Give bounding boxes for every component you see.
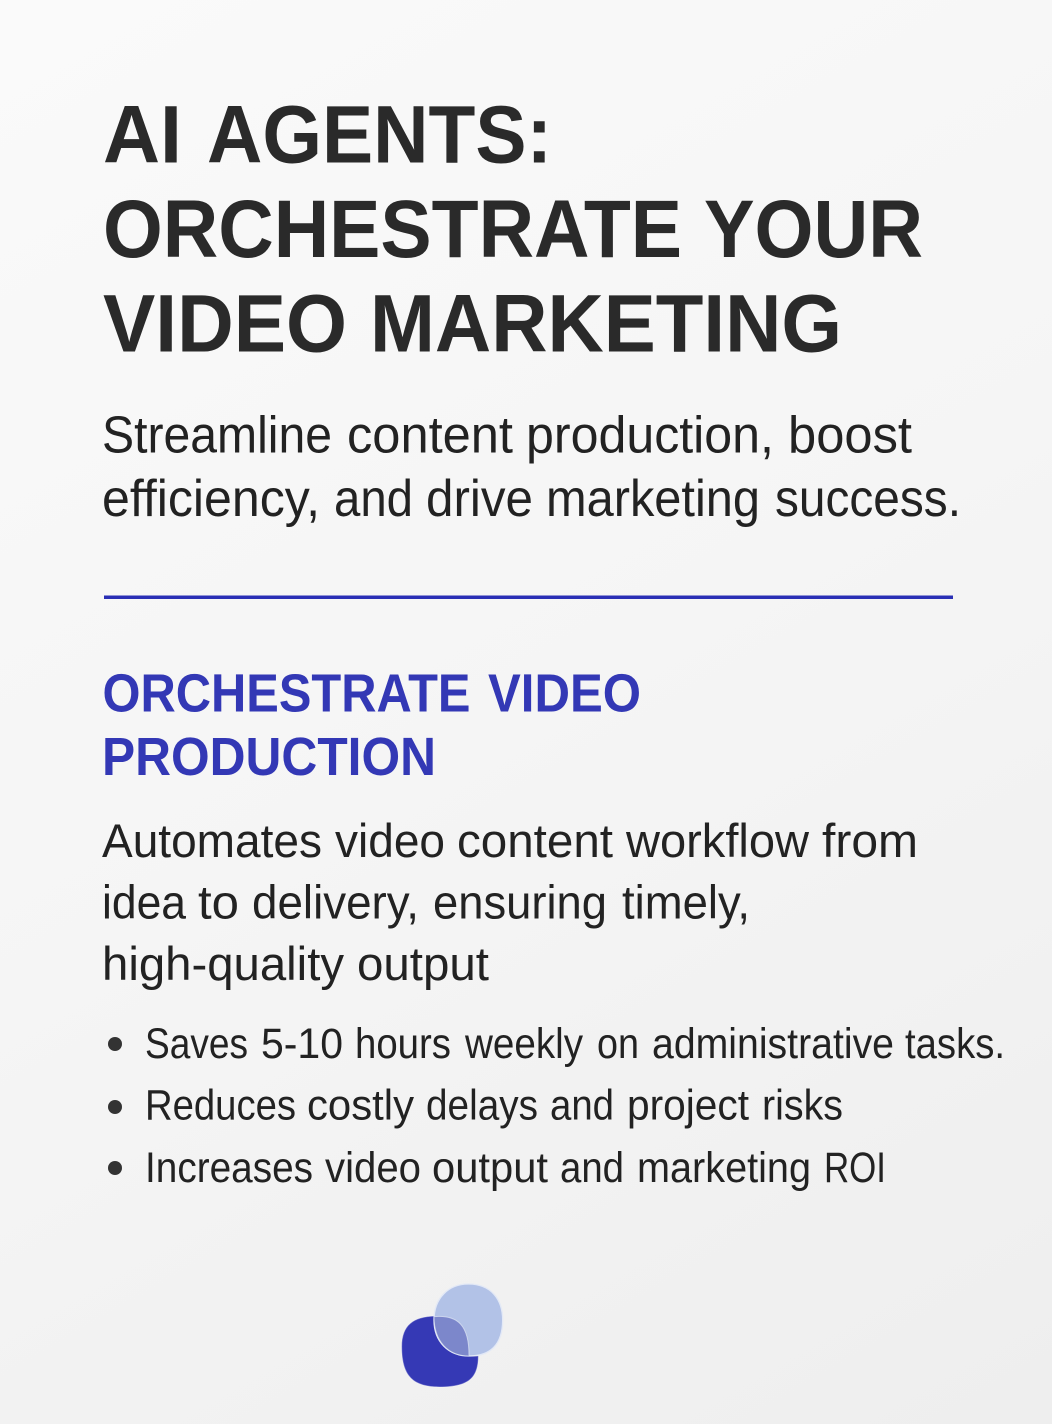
body description: idea [102,876,187,928]
bullet: increases output: output [432,1144,548,1192]
title: AI [103,90,182,180]
title: YOUR [704,184,923,275]
bullet: reduces delays: risks [762,1082,843,1130]
bullet: saves hours [108,1020,1005,1068]
subtitle: production, [526,406,774,464]
bullet: reduces delays: Reduces [145,1082,296,1130]
bullet: increases output: and [560,1144,624,1192]
subtitle: drive [426,470,533,528]
bullet: increases output [108,1144,886,1192]
body description: output [357,937,489,990]
bullet: saves hours: tasks. [905,1020,1005,1068]
bullet: reduces delays: costly [307,1082,414,1130]
body description: Automates [102,814,322,867]
bullet: saves hours: on [597,1020,639,1068]
subtitle: marketing [546,470,760,528]
body description: video [335,814,445,867]
icon: overlapping rounded shapes logo [402,1284,503,1387]
bullet: saves hours: administrative [652,1020,894,1068]
title: VIDEO [103,278,347,370]
bullet: increases output: video [325,1144,421,1192]
bullet: reduces delays: and [550,1082,614,1130]
title: MARKETING [370,278,842,370]
body description: to [198,876,239,928]
body description: ensuring [433,876,607,928]
bullet: reduces delays: project [627,1082,749,1130]
bullet: reduces delays: delays [426,1082,538,1130]
section heading [102,664,641,787]
subtitle: Streamline [102,406,332,464]
section heading: PRODUCTION [102,727,436,787]
bullet: saves hours: Saves [145,1020,248,1068]
bullet: saves hours: weekly [464,1020,583,1068]
body description: high-quality [102,937,344,990]
subtitle: boost [788,406,913,464]
bullet: increases output: marketing [637,1144,811,1192]
subtitle [102,406,961,528]
body description: delivery, [252,876,419,928]
bullet: reduces delays [108,1082,843,1130]
bullet: increases output: ROI [824,1144,886,1192]
title: ORCHESTRATE [103,184,682,275]
bullet: saves hours: 5-10 [261,1020,343,1068]
subtitle: efficiency, [102,470,320,528]
body description: workflow [625,814,810,867]
section heading: VIDEO [488,664,641,724]
subtitle: and [334,470,413,528]
subtitle: success. [775,470,961,528]
title: AGENTS: [207,90,552,180]
title [103,90,923,370]
body description [102,814,918,990]
subtitle: content [347,406,514,464]
bullet: saves hours: hours [355,1020,451,1068]
bullet list [108,1020,1005,1192]
body description: from [822,814,918,867]
section heading: ORCHESTRATE [102,664,470,724]
bullet: increases output: Increases [145,1144,313,1192]
body description: content [457,814,613,867]
body description: timely, [622,876,750,928]
